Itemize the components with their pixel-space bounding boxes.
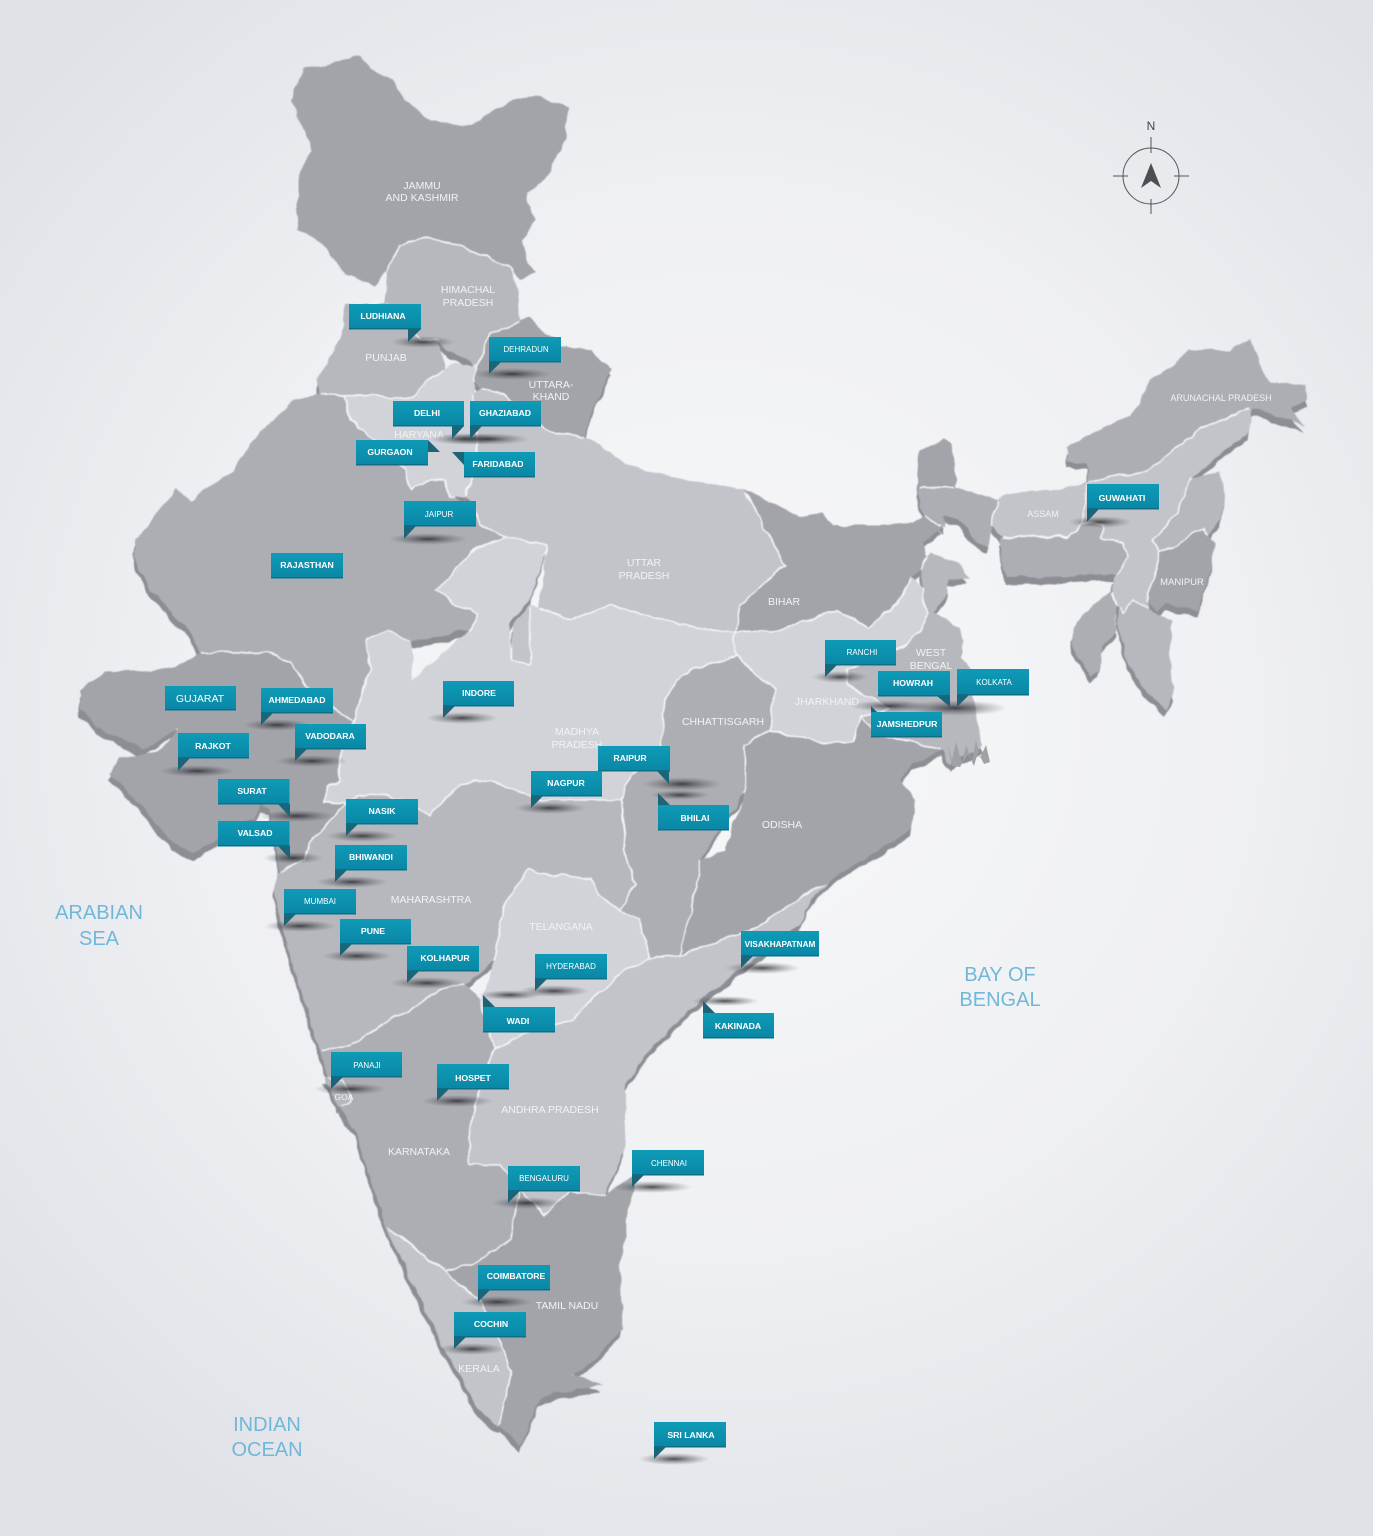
state labels: JHARKHAND xyxy=(795,696,859,708)
pin: Wadi xyxy=(478,990,555,1032)
state labels: AND KASHMIR xyxy=(386,192,459,204)
pin: Bengaluru xyxy=(491,1166,580,1209)
pin: Hyderabad: HYDERABAD xyxy=(546,962,596,971)
state labels: ASSAM xyxy=(1027,509,1059,519)
state: Karnataka xyxy=(320,985,520,1272)
pin: Bhiwandi: BHIWANDI xyxy=(349,852,393,862)
pin: Howrah: HOWRAH xyxy=(893,678,933,688)
state labels: PRADESH xyxy=(443,297,493,309)
state: Sikkim xyxy=(918,439,955,488)
pin: Ludhiana: LUDHIANA xyxy=(360,311,406,321)
pin: Bhilai: BHILAI xyxy=(681,813,709,823)
state labels xyxy=(335,180,1272,1375)
pin: Hyderabad xyxy=(518,954,607,997)
state: Gujarat xyxy=(80,653,353,872)
pin: Ludhiana xyxy=(349,304,455,348)
pin: Bhiwandi xyxy=(316,845,407,888)
state labels: TAMIL NADU xyxy=(536,1300,598,1312)
pin: Kolkata: KOLKATA xyxy=(976,678,1013,687)
pin: Jamshedpur xyxy=(871,706,942,738)
pin: Faridabad xyxy=(452,452,535,478)
pin: Rajkot: RAJKOT xyxy=(195,741,232,751)
state labels: MADHYA xyxy=(555,726,599,738)
state: Chhattisgarh xyxy=(620,655,775,960)
map extrusion xyxy=(78,292,1308,1453)
pin: Hospet: HOSPET xyxy=(455,1073,492,1083)
pin: Surat xyxy=(218,779,335,822)
pin: Sri Lanka: SRI LANKA xyxy=(667,1430,715,1440)
pin: Dehradun: DEHRADUN xyxy=(503,345,549,354)
pin: Coimbatore: COIMBATORE xyxy=(487,1271,545,1281)
state: Rajasthan xyxy=(135,392,505,722)
state labels: KERALA xyxy=(458,1363,500,1375)
label: Rajasthan: RAJASTHAN xyxy=(280,560,334,570)
pin: Nagpur xyxy=(514,771,602,814)
state labels: HIMACHAL xyxy=(441,284,495,296)
compass: N xyxy=(1147,119,1155,133)
state labels: ARUNACHAL PRADESH xyxy=(1170,393,1272,403)
pin: Delhi: DELHI xyxy=(414,408,440,418)
pin: Ghaziabad: GHAZIABAD xyxy=(479,408,531,418)
sea label: Indian Ocean xyxy=(231,1414,303,1461)
pin: Jamshedpur: JAMSHEDPUR xyxy=(877,719,938,729)
state: Manipur xyxy=(1147,528,1215,612)
state labels: JAMMU xyxy=(403,180,441,192)
Sundarbans islands xyxy=(947,740,990,767)
label: Gujarat xyxy=(165,686,236,710)
state labels: PUNJAB xyxy=(365,352,407,364)
pin: Indore xyxy=(426,681,514,724)
sea label: Indian Ocean: OCEAN xyxy=(231,1439,303,1461)
state: Mizoram xyxy=(1117,600,1172,710)
pin: Kolhapur: KOLHAPUR xyxy=(420,953,470,963)
state: Punjab xyxy=(317,303,445,398)
pin: Vadodara xyxy=(276,724,366,767)
state labels: UTTARA- xyxy=(529,379,574,391)
sea label: Bay of Bengal: BENGAL xyxy=(959,989,1041,1011)
state labels: CHHATTISGARH xyxy=(682,716,764,728)
pin: Kakinada xyxy=(691,996,774,1038)
pin: Kakinada: KAKINADA xyxy=(715,1021,762,1031)
pin: Nasik: NASIK xyxy=(368,806,396,816)
pin: Chennai: CHENNAI xyxy=(651,1159,687,1168)
state labels: GOA xyxy=(335,1092,354,1102)
state labels: MANIPUR xyxy=(1160,577,1204,588)
compass xyxy=(1113,119,1189,214)
label: Rajasthan xyxy=(271,553,343,578)
pin: Nagpur: NAGPUR xyxy=(547,778,586,788)
pin: Coimbatore xyxy=(461,1265,550,1308)
state: Himachal Pradesh xyxy=(385,238,520,365)
state: Tamil Nadu xyxy=(445,1175,635,1446)
state: Arunachal Pradesh xyxy=(1067,338,1308,482)
pin: Howrah and Kolkata shadow xyxy=(903,700,1007,716)
pin: Valsad: VALSAD xyxy=(237,828,273,838)
state: Meghalaya xyxy=(1000,523,1128,578)
state labels: BIHAR xyxy=(768,596,800,608)
sea label: Bay of Bengal xyxy=(959,964,1041,1011)
pin: Guwahati xyxy=(1068,484,1159,528)
state: Goa xyxy=(325,1078,352,1108)
pin: Jaipur: JAIPUR xyxy=(425,510,453,519)
sea label: Arabian Sea xyxy=(55,902,143,950)
state: Andhra Pradesh xyxy=(470,880,830,1215)
pin: Guwahati: GUWAHATI xyxy=(1099,493,1145,503)
pin: Howrah xyxy=(878,671,950,707)
state labels: KHAND xyxy=(533,391,570,403)
state: Assam east xyxy=(1082,408,1252,613)
pin: Gurgaon: GURGAON xyxy=(367,447,413,457)
state labels: UTTAR xyxy=(627,557,662,569)
pin: Raipur xyxy=(598,746,722,791)
state: Telangana xyxy=(480,870,650,1050)
state labels: KARNATAKA xyxy=(388,1146,450,1158)
pin: Ranchi xyxy=(812,640,896,683)
state: Odisha xyxy=(680,717,943,955)
pin: Mumbai: MUMBAI xyxy=(304,897,336,906)
pin: Dehradun xyxy=(472,337,561,380)
state: West Bengal xyxy=(847,553,983,765)
sea label: Indian Ocean: INDIAN xyxy=(233,1414,301,1436)
pin: Chennai xyxy=(612,1150,704,1193)
state labels: HARYANA xyxy=(394,429,444,441)
pin: Wadi: WADI xyxy=(507,1016,529,1026)
pin: Ranchi: RANCHI xyxy=(847,648,877,657)
state: Jharkhand xyxy=(735,578,928,743)
state labels: MAHARASHTRA xyxy=(391,894,471,906)
pin: Panaji: PANAJI xyxy=(353,1061,381,1070)
pin: Raipur: RAIPUR xyxy=(613,753,647,763)
sea label: Arabian Sea: ARABIAN xyxy=(55,902,143,924)
pin: Ahmedabad: AHMEDABAD xyxy=(269,695,325,705)
state: Madhya Pradesh xyxy=(323,537,735,815)
state: Uttarakhand xyxy=(472,318,612,437)
pin: Cochin: COCHIN xyxy=(474,1319,508,1329)
state: Nagaland xyxy=(1153,472,1225,553)
sea label: Arabian Sea: SEA xyxy=(79,928,120,950)
state labels: ODISHA xyxy=(762,819,802,831)
state: Jammu and Kashmir xyxy=(291,55,568,285)
pin: Sri Lanka xyxy=(638,1422,726,1465)
northern Bengal strip xyxy=(918,487,997,547)
pin: Panaji xyxy=(314,1052,402,1095)
state: Assam west xyxy=(992,482,1088,537)
pin: Kolhapur xyxy=(390,946,479,989)
pin: Valsad xyxy=(218,821,323,864)
pin: Ghaziabad xyxy=(446,401,541,445)
pin: Nasik xyxy=(326,799,418,842)
pin: Cochin xyxy=(438,1312,526,1355)
state: Tripura xyxy=(1072,590,1117,677)
label: Gujarat: GUJARAT xyxy=(176,693,225,705)
state labels: ANDHRA PRADESH xyxy=(501,1104,599,1116)
pin: Hospet xyxy=(421,1064,509,1107)
pin: Gurgaon xyxy=(356,440,440,466)
pin: Vadodara: VADODARA xyxy=(305,731,355,741)
pin: Bhilai xyxy=(650,790,729,830)
pin: Jaipur xyxy=(388,501,476,545)
pin: Rajkot xyxy=(159,733,249,777)
pin: Indore: INDORE xyxy=(462,688,496,698)
pin: Visakhapatnam: VISAKHAPATNAM xyxy=(745,940,816,949)
pin: Jamshedpur shadow xyxy=(850,700,930,712)
state labels: PRADESH xyxy=(552,739,602,751)
pin: Surat: SURAT xyxy=(237,786,267,796)
pin: Faridabad: FARIDABAD xyxy=(472,459,524,469)
pin: Visakhapatnam xyxy=(724,931,819,974)
state labels: BENGAL xyxy=(910,660,952,672)
pin: Ahmedabad xyxy=(243,688,333,731)
state: Uttar Pradesh xyxy=(465,390,785,665)
pin: Delhi xyxy=(393,401,501,445)
state: Kerala xyxy=(385,1225,510,1426)
state labels: WEST xyxy=(916,647,947,659)
pin: Pune xyxy=(322,919,411,962)
state labels: PRADESH xyxy=(619,570,669,582)
sea label: Bay of Bengal: BAY OF xyxy=(964,964,1036,986)
pin: Bengaluru: BENGALURU xyxy=(519,1174,569,1183)
pin: Pune: PUNE xyxy=(361,926,385,936)
state: Maharashtra xyxy=(275,780,635,1050)
state: Bihar xyxy=(735,490,943,632)
pin: Kolkata xyxy=(957,669,1029,707)
pin: Mumbai xyxy=(264,889,356,932)
state labels: TELANGANA xyxy=(529,921,593,933)
state: Haryana xyxy=(345,365,478,497)
